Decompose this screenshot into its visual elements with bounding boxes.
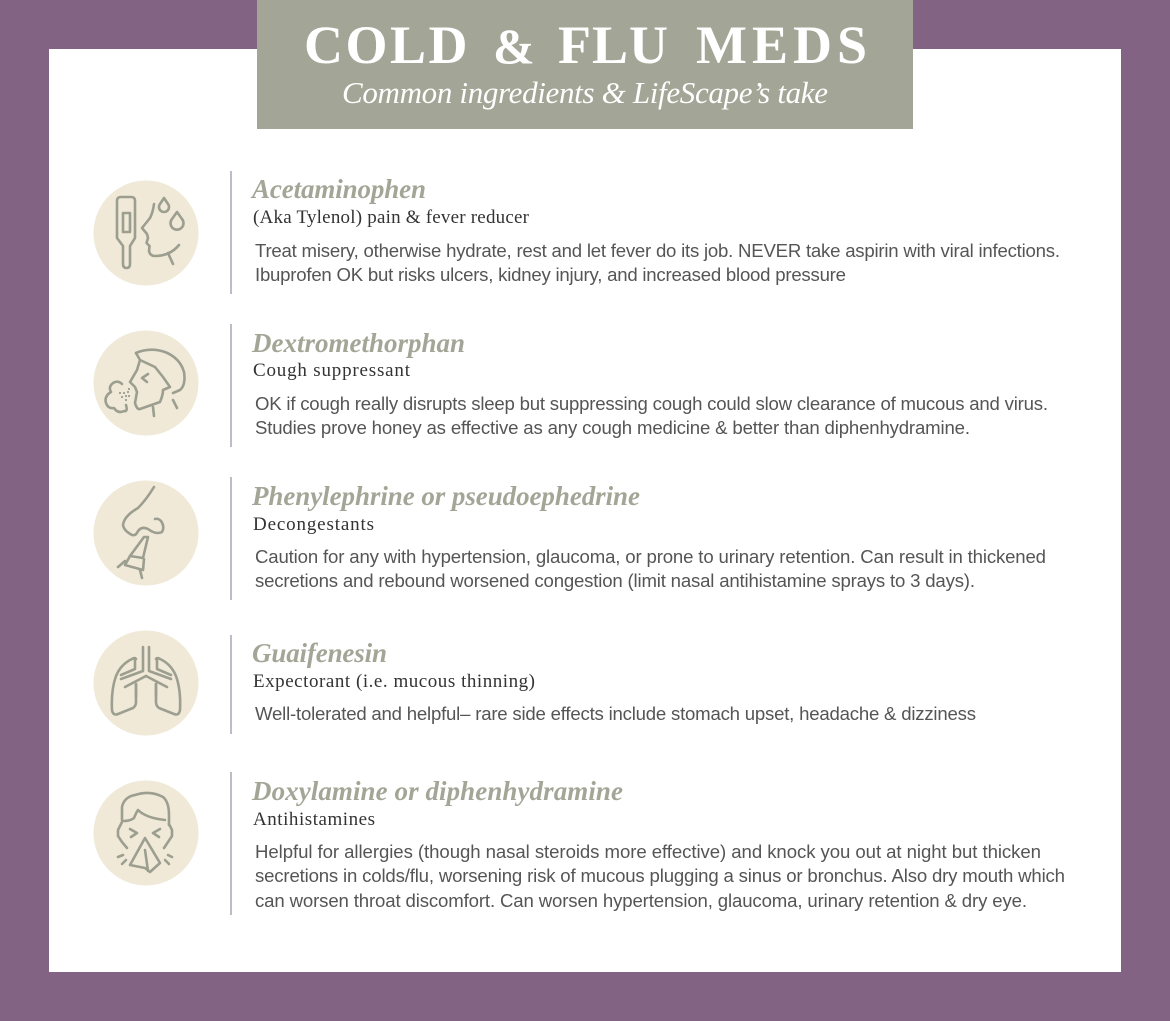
divider (230, 772, 232, 915)
subheading: Decongestants (253, 514, 374, 535)
icon: coughing person (94, 330, 198, 436)
body text: Studies prove honey as effective as any cough medicine & better than diphenhydramine. (255, 417, 970, 438)
icon: lungs (94, 630, 198, 736)
body text: secretions in colds/flu, worsening risk of mucous plugging a sinus or bronchus. Also dry mouth which (255, 865, 1065, 886)
icon: thermometer and feverish face (94, 180, 198, 286)
body text: Helpful for allergies (though nasal steroids more effective) and knock you out at night but thicken (255, 841, 1041, 862)
body text (255, 841, 1065, 911)
body text: Well-tolerated and helpful– rare side effects include stomach upset, headache & dizziness (255, 703, 976, 724)
body text: secretions and rebound worsened congestion (limit nasal antihistamine sprays to 3 days). (255, 570, 975, 591)
row: doxylamine (94, 772, 1065, 915)
row: dextromethorphan (94, 324, 1048, 447)
title: & (493, 18, 535, 74)
title: MEDS (696, 15, 872, 75)
heading: Dextromethorphan (251, 328, 465, 358)
subheading: (Aka Tylenol) pain & fever reducer (253, 207, 530, 228)
cough droplets (119, 388, 130, 401)
title: COLD (304, 15, 470, 75)
divider (230, 477, 232, 600)
icon: nose and nasal spray (94, 480, 198, 586)
body text: can worsen throat discomfort. Can worsen hypertension, glaucoma, urinary retention & dry eye. (255, 890, 1027, 911)
heading: Phenylephrine or pseudoephedrine (251, 481, 640, 511)
row: acetaminophen (94, 171, 1060, 294)
header banner (257, 0, 913, 129)
subheading: Antihistamines (253, 809, 375, 830)
subtitle: Common ingredients & LifeScape’s take (342, 75, 828, 110)
heading: Doxylamine or diphenhydramine (251, 776, 623, 806)
body text (255, 240, 1060, 285)
icon: sneezing person with tissue (94, 780, 198, 886)
body text: Treat misery, otherwise hydrate, rest and let fever do its job. NEVER take aspirin with viral infections. (255, 240, 1060, 261)
row: guaifenesin (94, 630, 976, 736)
body text (255, 393, 1048, 438)
divider (230, 171, 232, 294)
subheading: Expectorant (i.e. mucous thinning) (253, 671, 535, 692)
heading: Acetaminophen (250, 174, 426, 204)
heading: Guaifenesin (252, 638, 387, 668)
row: phenylephrine (94, 477, 1046, 600)
body text: Caution for any with hypertension, glaucoma, or prone to urinary retention. Can result in thickened (255, 546, 1046, 567)
divider (230, 635, 232, 734)
divider (230, 324, 232, 447)
title: FLU (558, 15, 669, 75)
subheading: Cough suppressant (253, 360, 411, 381)
body text: Ibuprofen OK but risks ulcers, kidney injury, and increased blood pressure (255, 264, 846, 285)
body text: OK if cough really disrupts sleep but suppressing cough could slow clearance of mucous and virus. (255, 393, 1048, 414)
body text (255, 546, 1046, 591)
